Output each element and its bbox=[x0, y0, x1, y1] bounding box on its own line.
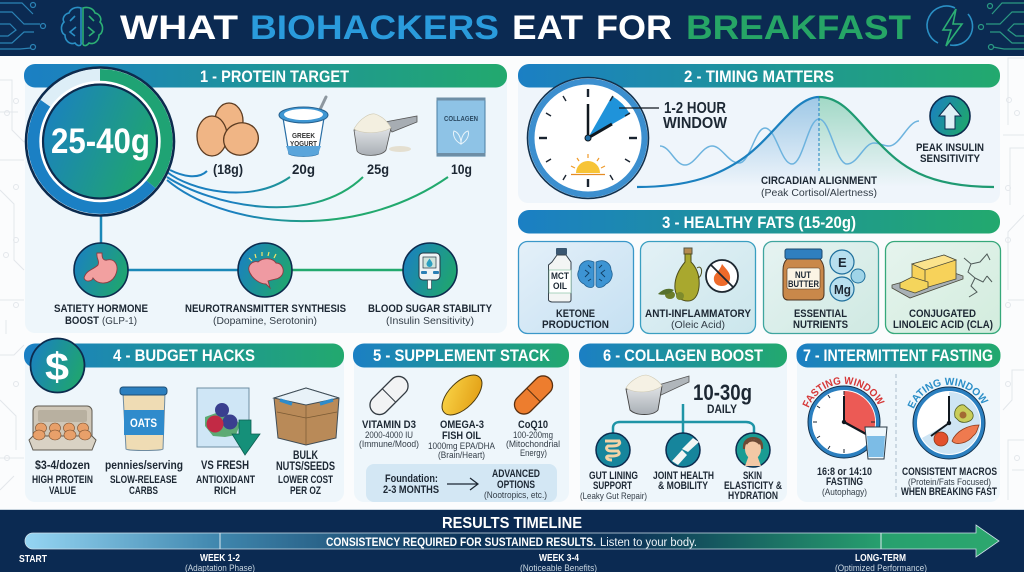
collagen benefit labels: HYDRATION bbox=[728, 490, 778, 502]
icon: molecule bbox=[964, 254, 992, 297]
branch connector bbox=[613, 404, 754, 433]
coq10 label: Energy) bbox=[520, 447, 547, 458]
window label: 1-2 HOUR bbox=[664, 100, 726, 117]
milestone: long-term: LONG-TERM bbox=[855, 553, 906, 564]
budget labels: BULK bbox=[293, 449, 318, 462]
icon: frozen berries bag bbox=[197, 388, 260, 455]
heading bar bbox=[579, 344, 787, 368]
collagen benefit labels: (Leaky Gut Repair) bbox=[580, 490, 647, 501]
heading bar: 1 - PROTEIN TARGET bbox=[200, 67, 350, 86]
icon: MCT oil bottle: OIL bbox=[553, 281, 567, 291]
timeline heading: RESULTS TIMELINE bbox=[442, 515, 582, 532]
icon: right circuit lines bbox=[978, 3, 1024, 50]
benefit labels bbox=[54, 303, 493, 327]
icon: joint bbox=[666, 433, 700, 467]
decorative circuit background bbox=[0, 58, 1024, 500]
benefit labels: BLOOD SUGAR STABILITY bbox=[368, 303, 493, 315]
icon: lightning bolt in ring bbox=[927, 6, 973, 46]
budget labels: CARBS bbox=[129, 485, 158, 497]
label: CONJUGATED bbox=[909, 308, 976, 320]
eating window curved label: EATING WINDOW bbox=[907, 378, 989, 408]
icon: no flame bbox=[706, 260, 738, 292]
icon: gut bbox=[596, 433, 630, 467]
vitamin d3 label: (Immune/Mood) bbox=[359, 438, 419, 449]
icon: skin face bbox=[736, 433, 770, 467]
icon: egg carton bbox=[29, 406, 96, 450]
icon: vitamin E: E bbox=[838, 255, 847, 270]
benefit labels: NEUROTRANSMITTER SYNTHESIS bbox=[185, 303, 346, 315]
omega-3 label: OMEGA-3 bbox=[440, 419, 484, 431]
panel: 7 intermittent fasting bbox=[796, 344, 1000, 502]
budget labels: VS FRESH bbox=[201, 459, 249, 472]
icon: water glass bbox=[865, 427, 887, 459]
food gram labels: 20g bbox=[292, 161, 315, 177]
benefit labels: (GLP-1) bbox=[102, 316, 137, 327]
10-30g daily: 10-30g bbox=[693, 380, 752, 405]
icon: olive oil bbox=[658, 248, 702, 301]
icon: greek yogurt cup: YOGURT bbox=[290, 139, 317, 148]
icon: clock with 1-2 hour window bbox=[528, 78, 659, 198]
vitamin d3 label bbox=[359, 419, 419, 449]
label bbox=[645, 308, 752, 331]
food gram labels bbox=[213, 161, 472, 177]
timeline message: Listen to your body. bbox=[600, 535, 697, 549]
icon: collagen packet bbox=[436, 98, 486, 156]
budget labels: $3-4/dozen bbox=[35, 459, 90, 472]
milestone: long-term bbox=[835, 553, 927, 572]
title: FOR bbox=[596, 9, 672, 47]
icon: oats container bbox=[120, 387, 167, 450]
icon: butter on plate bbox=[892, 255, 963, 298]
circadian label: (Peak Cortisol/Alertness) bbox=[761, 188, 877, 199]
milestone: week 1-2 bbox=[185, 553, 255, 572]
collagen benefit labels bbox=[580, 470, 782, 502]
icon: glucose meter bbox=[403, 243, 457, 297]
icon: brain outline bbox=[61, 7, 103, 46]
icon: greek yogurt cup: GREEK bbox=[292, 131, 316, 140]
vitamin d3 label: 2000-4000 IU bbox=[365, 429, 413, 440]
food gram labels: 25g bbox=[367, 161, 389, 177]
heading bar: 4 - BUDGET HACKS bbox=[113, 346, 255, 365]
eating label: CONSISTENT MACROS bbox=[902, 466, 997, 478]
title: EAT bbox=[512, 9, 583, 47]
benefit labels: SATIETY HORMONE bbox=[54, 303, 148, 315]
label: KETONE bbox=[556, 308, 595, 320]
panel: 5 supplement stack bbox=[353, 344, 569, 502]
window label bbox=[663, 100, 728, 132]
coq10 label: (Mitochondrial bbox=[506, 438, 560, 449]
budget labels: SLOW-RELEASE bbox=[110, 474, 177, 486]
budget labels: PER OZ bbox=[290, 485, 321, 497]
food gram labels: 10g bbox=[451, 161, 472, 177]
10-30g daily: DAILY bbox=[707, 403, 737, 416]
label: (Oleic Acid) bbox=[671, 320, 725, 331]
collagen benefit labels: ELASTICITY & bbox=[724, 480, 782, 492]
label: ANTI-INFLAMMATORY bbox=[645, 308, 752, 320]
budget labels: VALUE bbox=[49, 485, 76, 497]
panel: 4 budget hacks bbox=[24, 338, 344, 502]
arrow bbox=[447, 478, 478, 490]
budget labels bbox=[32, 449, 335, 497]
budget labels: HIGH PROTEIN bbox=[32, 474, 93, 486]
panel: 6 collagen boost bbox=[579, 344, 787, 502]
budget labels: ANTIOXIDANT bbox=[196, 474, 255, 486]
big target ring: 25-40g: 25-40g bbox=[51, 122, 150, 161]
panel: 2 timing matters bbox=[518, 64, 1000, 203]
foundation callout: OPTIONS bbox=[497, 479, 535, 491]
heading bar bbox=[24, 64, 507, 88]
budget labels: NUTS/SEEDS bbox=[276, 460, 335, 473]
icon: collagen scoop bbox=[626, 375, 689, 414]
milestone: week 3-4 bbox=[520, 553, 597, 572]
collagen benefit labels: & MOBILITY bbox=[658, 480, 709, 492]
eating label bbox=[901, 466, 997, 498]
milestone: week 3-4: WEEK 3-4 bbox=[539, 553, 579, 564]
heading bar: 3 - HEALTHY FATS (15-20g) bbox=[662, 213, 856, 232]
coq10 label bbox=[506, 419, 560, 458]
icon: eggs bbox=[197, 103, 263, 160]
connector lines bbox=[101, 170, 448, 270]
icon: greek yogurt cup bbox=[279, 97, 328, 156]
divider bbox=[895, 374, 897, 497]
heading bar bbox=[518, 210, 1000, 234]
coq10 label: CoQ10 bbox=[518, 419, 548, 431]
peak insulin label bbox=[916, 142, 984, 165]
heading bar: 6 - COLLAGEN BOOST bbox=[603, 346, 764, 365]
peak insulin label: SENSITIVITY bbox=[920, 153, 981, 165]
panel: results timeline bbox=[0, 509, 1024, 572]
circadian label bbox=[761, 175, 877, 199]
budget labels: pennies/serving bbox=[105, 459, 183, 472]
heading bar bbox=[24, 344, 344, 368]
label bbox=[542, 308, 609, 331]
icon: up arrow bbox=[930, 96, 970, 136]
panel: 3 healthy fats bbox=[518, 210, 1000, 334]
label bbox=[893, 308, 993, 331]
collagen benefit labels: SUPPORT bbox=[593, 480, 632, 492]
icon: brain bbox=[238, 243, 292, 297]
omega-3 label: FISH OIL bbox=[442, 430, 481, 442]
budget labels: LOWER COST bbox=[278, 474, 333, 486]
icon: brain bbox=[578, 261, 612, 288]
heading bar bbox=[518, 64, 1000, 88]
timeline message: CONSISTENCY REQUIRED FOR SUSTAINED RESULTS. bbox=[326, 535, 596, 549]
icon: dollar badge bbox=[30, 338, 84, 392]
icon: collagen packet: COLLAGEN bbox=[444, 116, 478, 123]
omega-3 label: (Brain/Heart) bbox=[438, 449, 485, 460]
title: WHAT bbox=[120, 9, 238, 47]
icon: small mineral bbox=[851, 269, 865, 283]
window label: WINDOW bbox=[663, 115, 728, 132]
icon: stomach bbox=[74, 243, 128, 297]
label: NUTRIENTS bbox=[793, 319, 848, 331]
icon: fasting clock bbox=[808, 386, 880, 458]
card: essential nutrients bbox=[764, 242, 878, 334]
card: ketone production bbox=[518, 242, 634, 334]
benefit labels: (Insulin Sensitivity) bbox=[386, 316, 474, 327]
milestone: start: START bbox=[19, 554, 47, 565]
card: CLA bbox=[886, 242, 1000, 334]
fasting label: FASTING bbox=[826, 476, 863, 488]
coq10 label: 100-200mg bbox=[513, 429, 553, 440]
10-30g daily bbox=[693, 380, 752, 416]
title bbox=[120, 9, 911, 47]
icon: oats container: OATS bbox=[130, 416, 157, 430]
icon: MCT oil bottle: MCT bbox=[551, 271, 569, 281]
fasting label bbox=[817, 466, 872, 497]
label: LINOLEIC ACID (CLA) bbox=[893, 319, 993, 331]
foundation callout: ADVANCED bbox=[492, 468, 540, 480]
collagen benefit labels: GUT LINING bbox=[589, 470, 638, 482]
card: anti-inflammatory bbox=[640, 242, 756, 334]
eating label: (Protein/Fats Focused) bbox=[908, 476, 991, 487]
title: BIOHACKERS bbox=[250, 9, 499, 47]
icon: magnesium: Mg bbox=[834, 282, 851, 297]
heading bar: 5 - SUPPLEMENT STACK bbox=[373, 346, 551, 365]
icon: nut butter jar bbox=[783, 249, 824, 300]
foundation callout: Foundation: bbox=[385, 473, 438, 485]
title: BREAKFAST bbox=[686, 9, 911, 47]
icon: white capsule bbox=[366, 373, 412, 418]
icon: nut butter jar: NUT bbox=[795, 270, 811, 280]
food gram labels: (18g) bbox=[213, 161, 243, 177]
omega-3 label bbox=[428, 419, 496, 460]
benefit labels: BOOST bbox=[65, 315, 99, 327]
eating label: WHEN BREAKING FAST bbox=[901, 486, 997, 498]
milestone: week 1-2: WEEK 1-2 bbox=[200, 553, 240, 564]
omega-3 label: 1000mg EPA/DHA bbox=[428, 440, 496, 451]
label: PRODUCTION bbox=[542, 319, 609, 331]
icon: dollar badge: $ bbox=[45, 346, 69, 389]
label: ESSENTIAL bbox=[794, 308, 847, 320]
fasting window curved label: FASTING WINDOW bbox=[802, 376, 885, 408]
foundation callout bbox=[366, 464, 557, 502]
icon: eating clock with food bbox=[913, 387, 985, 459]
fasting label: (Autophagy) bbox=[822, 486, 867, 497]
icon: MCT oil bottle bbox=[548, 248, 571, 302]
panel: 1 protein target bbox=[24, 64, 507, 333]
vitamin d3 label: VITAMIN D3 bbox=[362, 419, 416, 431]
heading bar: 7 - INTERMITTENT FASTING bbox=[803, 346, 993, 365]
foundation callout: (Nootropics, etc.) bbox=[484, 489, 547, 500]
icon: nuts container bbox=[274, 388, 339, 445]
circadian curve bbox=[637, 97, 994, 187]
benefit labels: (Dopamine, Serotonin) bbox=[213, 316, 317, 327]
heading bar: 2 - TIMING MATTERS bbox=[684, 67, 834, 86]
icon: coq10 capsule bbox=[511, 372, 556, 418]
fasting label: 16:8 or 14:10 bbox=[817, 466, 872, 478]
big target ring: 25-40g bbox=[26, 68, 174, 216]
icon: protein scoop bbox=[354, 114, 417, 155]
header banner bbox=[0, 0, 1024, 56]
foundation callout: 2-3 MONTHS bbox=[383, 484, 439, 496]
timeline arrow bbox=[25, 525, 999, 557]
label bbox=[793, 308, 848, 331]
icon: left circuit lines bbox=[0, 2, 46, 50]
collagen benefit labels: SKIN bbox=[743, 470, 762, 482]
icon: nut butter jar: BUTTER bbox=[788, 279, 819, 289]
icon: omega-3 softgel bbox=[435, 368, 489, 422]
peak insulin label: PEAK INSULIN bbox=[916, 142, 984, 154]
budget labels: RICH bbox=[214, 485, 236, 497]
collagen benefit labels: JOINT HEALTH bbox=[653, 470, 714, 482]
circadian label: CIRCADIAN ALIGNMENT bbox=[761, 175, 877, 187]
